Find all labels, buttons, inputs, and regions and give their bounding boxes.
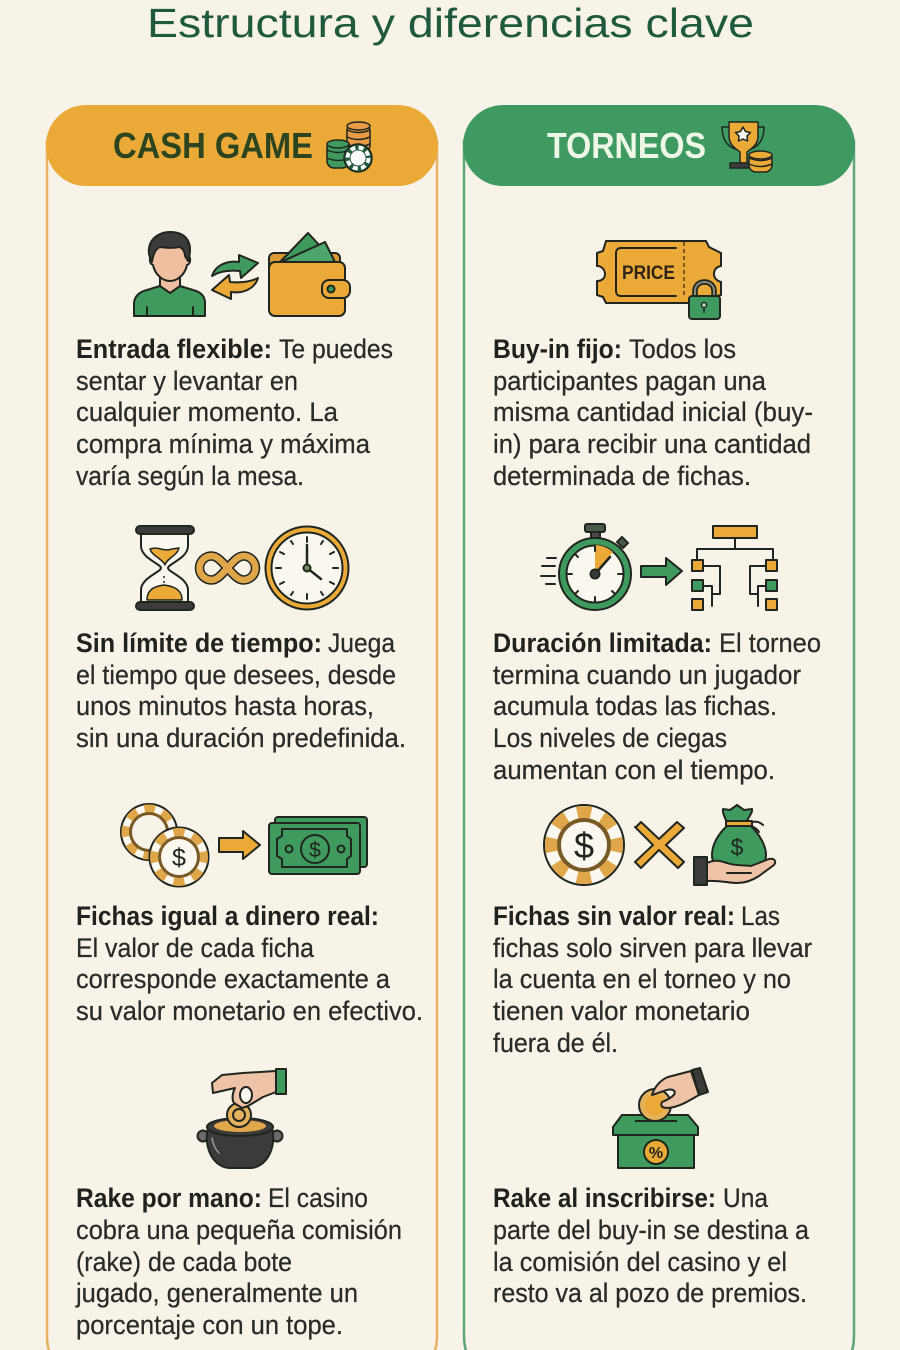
text: sin limite de tiempo: el tiempo que desees, desde [76,660,396,690]
icon: chip stacks [327,122,372,172]
text: rake por mano: cobra una pequeña comisión [76,1215,402,1245]
item: rake al inscribirse [493,1068,810,1308]
item: fichas igual a dinero real [76,804,423,1026]
text: entrada flexible: Entrada flexible: [76,334,272,364]
text: rake al inscribirse: Rake al inscribirse: [493,1183,716,1213]
text: sin limite de tiempo: Juega [328,628,396,658]
text: rake por mano: jugado, generalmente un [75,1278,358,1308]
text: buy-in fijo: determinada de fichas. [493,461,751,491]
text: buy-in fijo [493,334,813,491]
icon: hand dropping coin into box [613,1068,708,1168]
text: sin limite de tiempo: Sin límite de tiempo: [76,628,322,658]
text: rake por mano: El casino [268,1183,368,1213]
text: duracion limitada: Los niveles de ciegas [493,723,727,753]
text: entrada flexible [76,334,393,491]
icon: chips, arrow and banknotes: $ [172,844,186,872]
text: fichas sin valor real: la cuenta en el torneo y no [493,964,791,994]
text: duracion limitada: Duración limitada: [493,628,712,658]
panel: cash game [46,105,438,1350]
icon: price ticket with lock [597,241,721,319]
text: entrada flexible: cualquier momento. La [76,397,339,427]
text: duracion limitada: El torneo [719,628,821,658]
text: entrada flexible: varía según la mesa. [76,461,304,491]
text: fichas igual a dinero real: su valor monetario en efectivo. [76,996,423,1026]
text: buy-in fijo: misma cantidad inicial (buy- [493,397,813,427]
header: cash game: CASH GAME [113,125,313,166]
text: fichas sin valor real: fuera de él. [493,1028,618,1058]
text: duracion limitada [493,628,821,785]
item: fichas sin valor real [493,805,812,1058]
icon: hand dropping coin into box: % [649,1145,663,1162]
icon: price ticket with lock: PRICE [622,263,675,284]
text: buy-in fijo: participantes pagan una [493,366,767,396]
item: entrada flexible [76,232,393,491]
text: rake al inscribirse: parte del buy-in se destina a [493,1215,810,1245]
text: entrada flexible: sentar y levantar en [76,366,298,396]
text: rake por mano: Rake por mano: [76,1183,262,1213]
icon: chips, arrow and banknotes: $ [309,839,321,862]
text: sin limite de tiempo: unos minutos hasta horas, [76,691,374,721]
text: buy-in fijo: Buy-in fijo: [493,334,622,364]
icon: stopwatch, arrow and tournament bracket [541,524,777,610]
header: torneos: TORNEOS [547,125,706,166]
text: rake por mano: porcentaje con un tope. [76,1310,343,1340]
item: rake por mano [75,1069,402,1340]
header: torneos [463,105,855,186]
text: buy-in fijo: Todos los [629,334,736,364]
text: fichas sin valor real: tienen valor monetario [493,996,750,1026]
panel: torneos [463,105,855,1350]
text: fichas igual a dinero real [76,901,423,1026]
text: rake al inscribirse: Una [723,1183,769,1213]
text: duracion limitada: aumentan con el tiempo. [493,755,775,785]
text: rake por mano: (rake) de cada bote [76,1247,292,1277]
text: sin limite de tiempo: sin una duración predefinida. [76,723,406,753]
text: fichas sin valor real: Fichas sin valor real: [493,901,735,931]
text: fichas igual a dinero real: Fichas igual a dinero real: [76,901,379,931]
title: Estructura y diferencias clave [147,0,754,46]
text: sin limite de tiempo [76,628,406,753]
icon: trophy and coins [722,122,772,172]
text: rake al inscribirse: la comisión del casino y el [493,1247,787,1277]
text: rake al inscribirse: resto va al pozo de premios. [493,1278,807,1308]
icon: chips, arrow and banknotes [121,804,367,886]
icon: chip, cross and money bag on hand [544,805,775,885]
text: duracion limitada: acumula todas las fichas. [493,691,777,721]
text: entrada flexible: compra mínima y máxima [76,429,371,459]
text: buy-in fijo: in) para recibir una cantidad [493,429,811,459]
icon: chip, cross and money bag on hand: $ [574,825,594,866]
text: rake al inscribirse [493,1183,810,1308]
item: buy-in fijo [493,241,813,491]
item: sin limite de tiempo [76,526,406,753]
text: fichas sin valor real: fichas solo sirven para llevar [493,933,812,963]
item: duracion limitada [493,524,821,785]
icon: hand dropping chip into pot [198,1069,286,1168]
text: duracion limitada: termina cuando un jugador [493,660,801,690]
text: fichas sin valor real: Las [741,901,780,931]
text: entrada flexible: Te puedes [279,334,393,364]
text: rake por mano [75,1183,402,1340]
text: fichas igual a dinero real: El valor de cada ficha [76,933,315,963]
icon: player exchanging with wallet [134,232,350,316]
icon: chip, cross and money bag on hand: $ [731,834,744,860]
icon: hourglass, infinity and clock [136,526,348,610]
text: fichas sin valor real [493,901,812,1058]
header: cash game [46,105,438,186]
text: fichas igual a dinero real: corresponde exactamente a [76,964,391,994]
